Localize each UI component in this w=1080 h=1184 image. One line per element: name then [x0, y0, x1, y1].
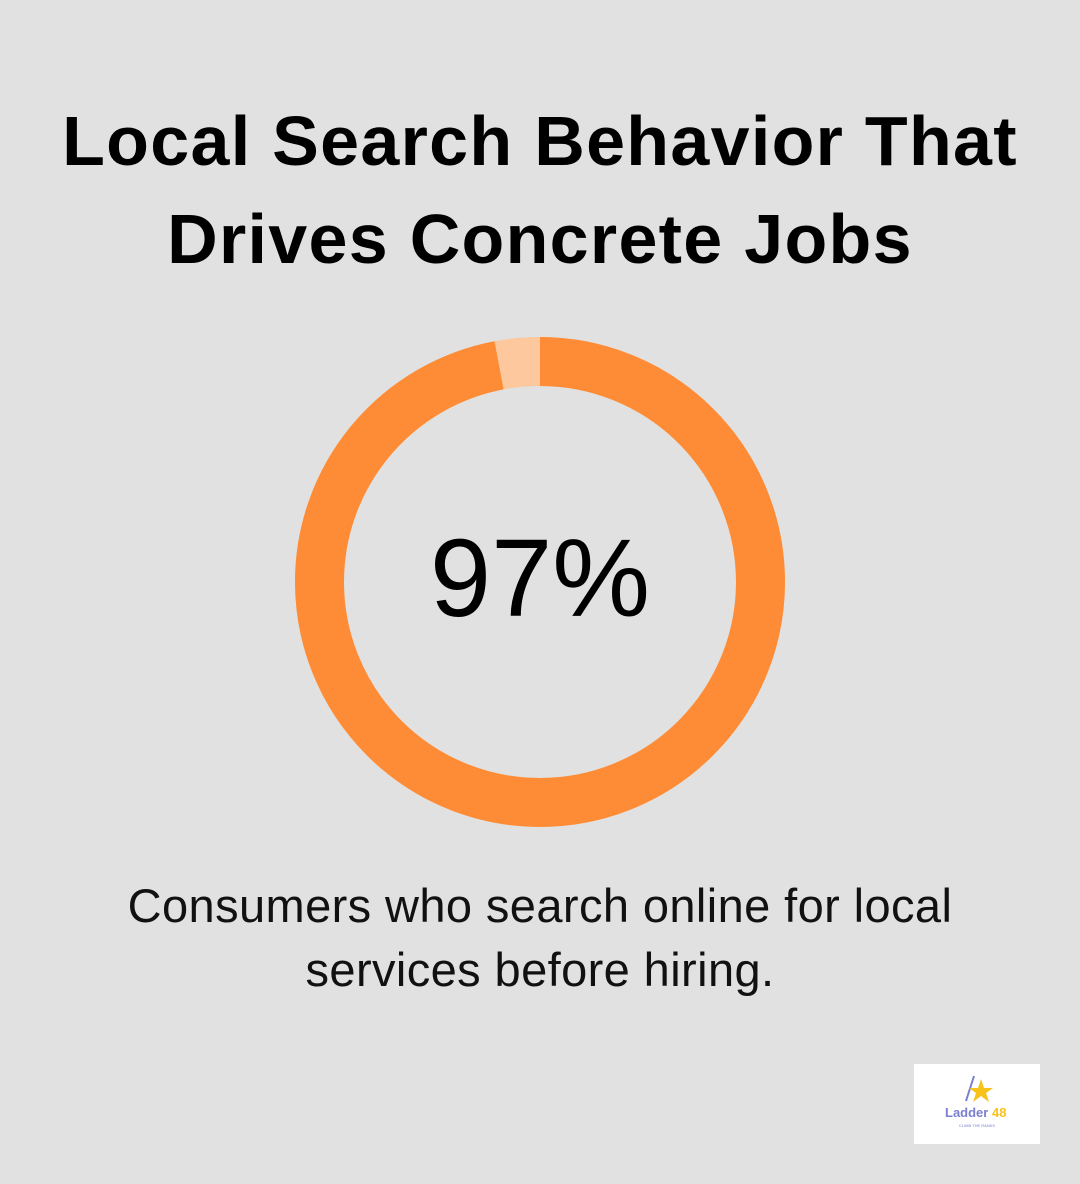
- donut chart: 97%: [430, 517, 650, 640]
- title: Local Search Behavior That: [62, 102, 1018, 180]
- logo: Ladder 48: [945, 1105, 1006, 1120]
- description: [128, 879, 952, 996]
- logo: [914, 1064, 1040, 1144]
- description: Consumers who search online for local: [128, 879, 952, 932]
- description: services before hiring.: [306, 943, 774, 996]
- logo: CLIMB THE RANKS: [959, 1123, 995, 1128]
- title: [62, 102, 1018, 278]
- title: Drives Concrete Jobs: [167, 200, 913, 278]
